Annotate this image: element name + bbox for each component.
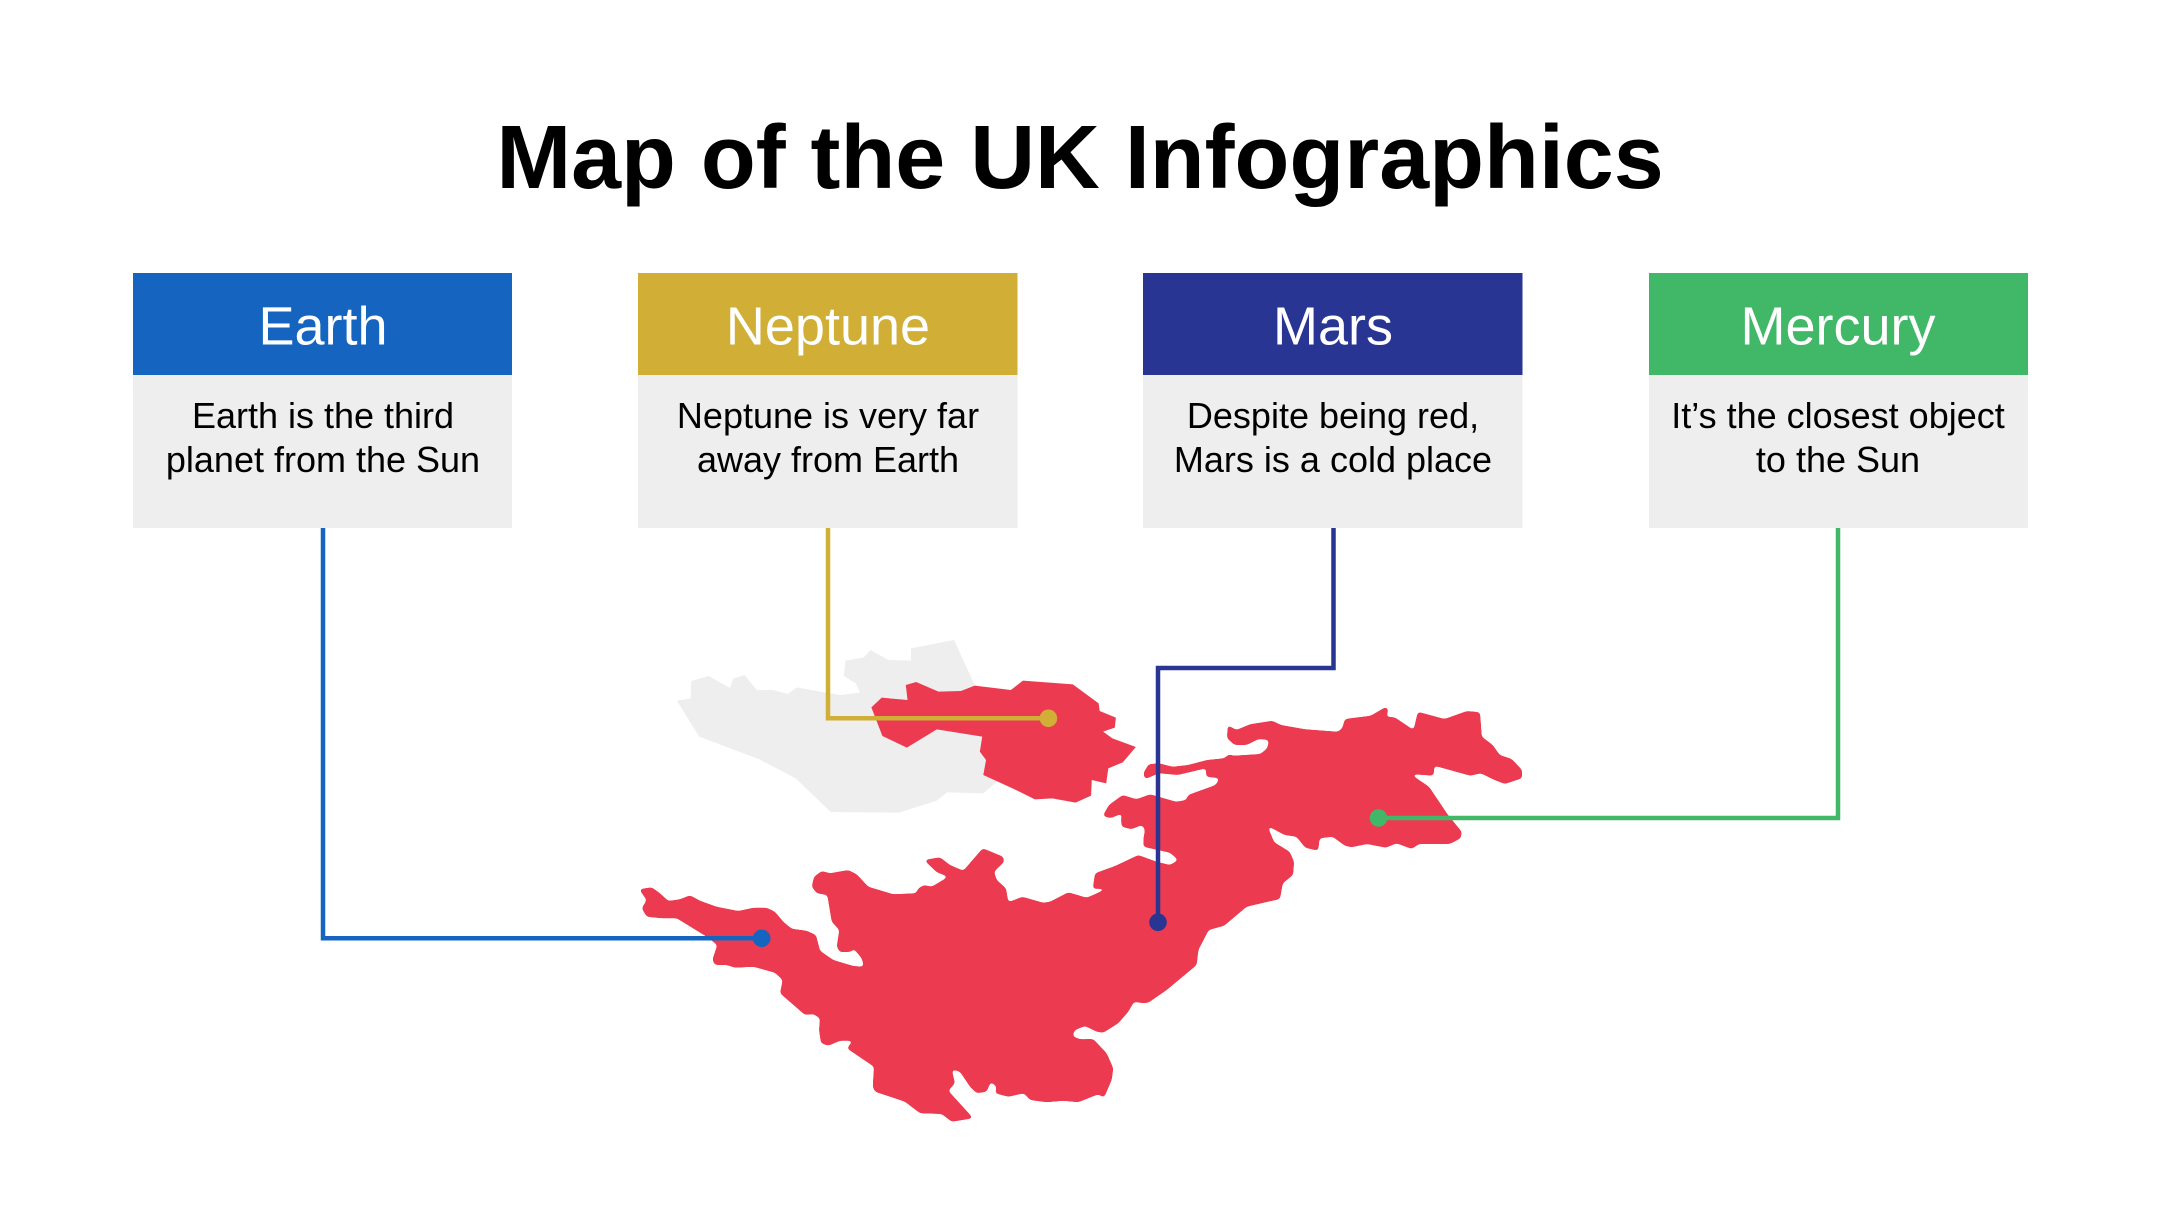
map region: main red landmass bbox=[639, 707, 1522, 1122]
title: Map of the UK Infographics bbox=[496, 108, 1664, 208]
panel: Mars: Despite being red, bbox=[1187, 395, 1479, 436]
panel: Neptune bbox=[638, 273, 1018, 528]
panel: Earth: Earth is the third bbox=[192, 395, 454, 436]
connector: Earth bbox=[323, 528, 770, 947]
panel: Mars: Mars bbox=[1273, 296, 1393, 356]
map region: northern red bbox=[871, 681, 1136, 803]
connector: Mercury bbox=[1370, 528, 1838, 827]
panel: Mercury: Mercury bbox=[1740, 296, 1936, 356]
panel: Neptune: Neptune is very far bbox=[677, 395, 979, 436]
map of the UK bbox=[639, 640, 1522, 1122]
panel: Mars: Mars is a cold place bbox=[1174, 439, 1492, 480]
panel: Earth bbox=[133, 273, 512, 528]
panel: Mercury: It’s the closest object bbox=[1671, 395, 2005, 436]
connector: Neptune bbox=[828, 528, 1057, 727]
connector: Mars bbox=[1149, 528, 1334, 931]
panel: Neptune: Neptune bbox=[726, 296, 930, 356]
panel: Mercury: to the Sun bbox=[1756, 439, 1920, 480]
panel: Earth: Earth bbox=[258, 296, 388, 356]
map region: Ireland grey bbox=[677, 640, 999, 813]
panel: Earth: planet from the Sun bbox=[166, 439, 480, 480]
panel: Neptune: away from Earth bbox=[697, 439, 959, 480]
panel: Mars bbox=[1143, 273, 1522, 528]
panel: Mercury bbox=[1649, 273, 2028, 528]
